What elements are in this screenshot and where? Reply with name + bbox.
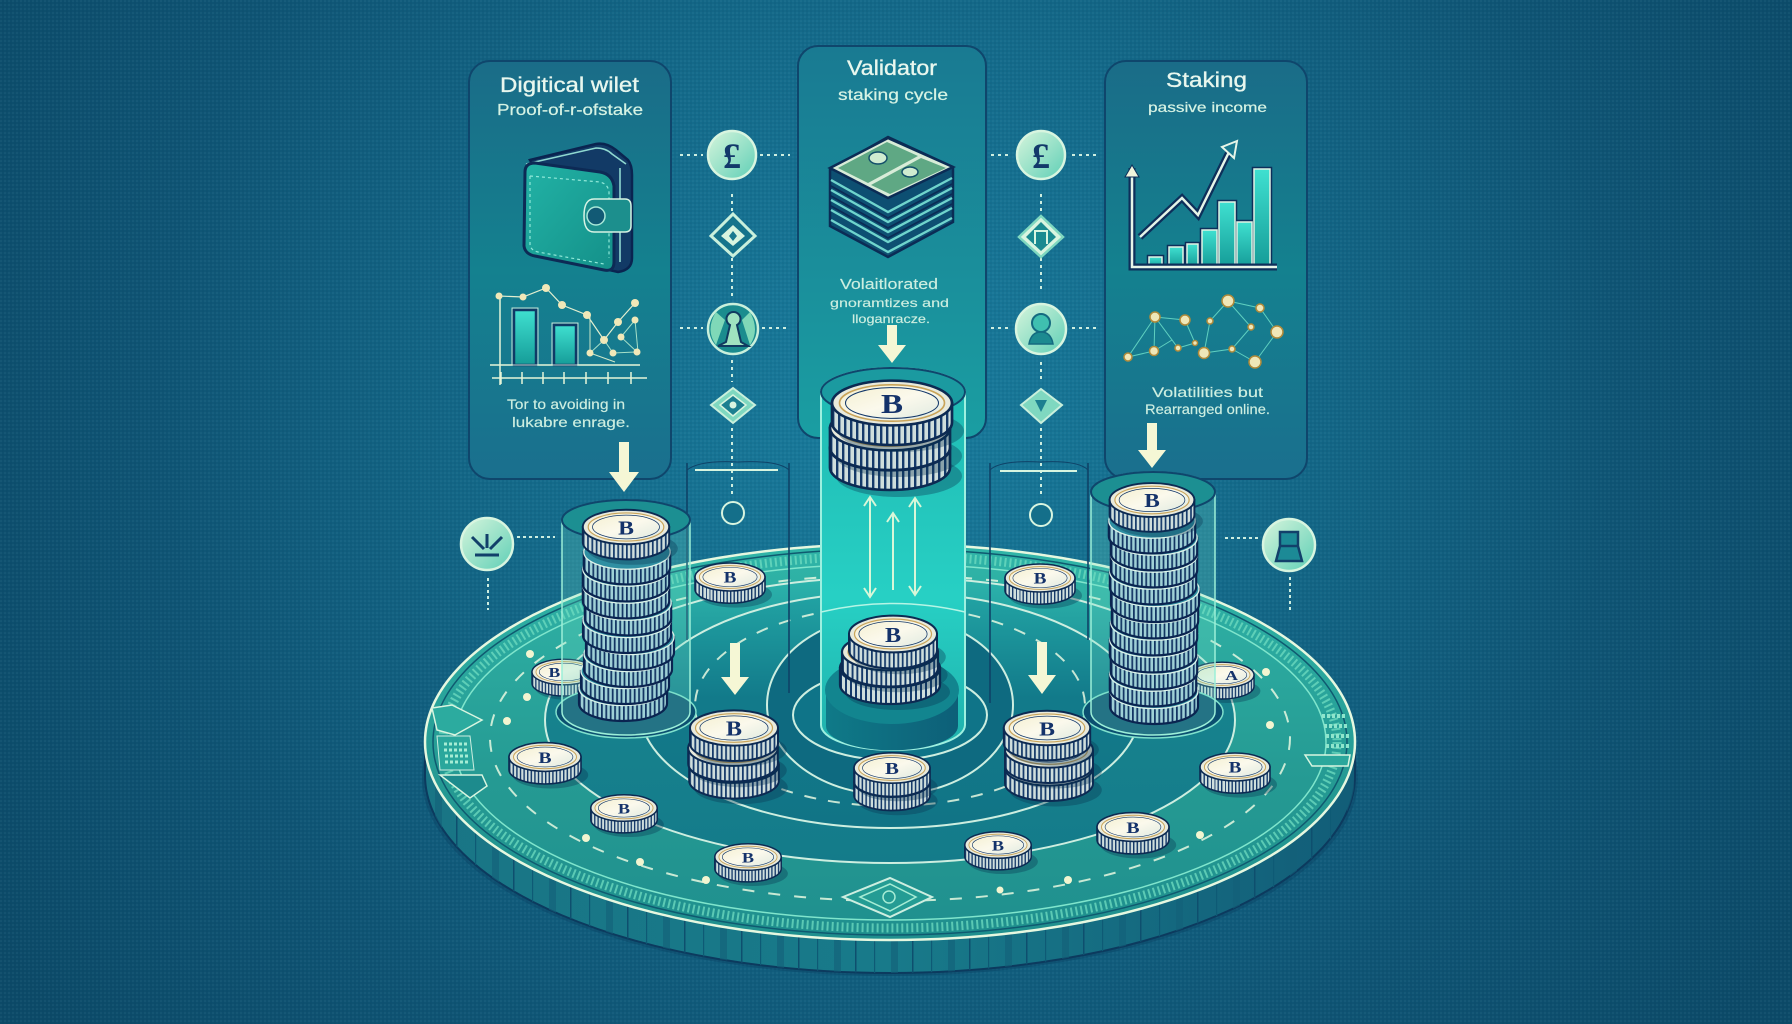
arrow: validator to stack: [878, 325, 906, 363]
dashed inner orbit: [695, 606, 1085, 806]
platform shadow: [422, 580, 1358, 976]
chart: growth bars and arrow: [1125, 141, 1277, 267]
side icon: left: [461, 518, 555, 610]
heading: validator: Validator: [847, 57, 937, 80]
coin stack: B: [1144, 490, 1160, 512]
icon: diamond eye: [711, 388, 755, 423]
platform top surface: [425, 544, 1355, 940]
coin: platform right: [1200, 753, 1277, 798]
arrow: wallet to stack: [609, 442, 639, 492]
platform: [425, 544, 1355, 973]
heading: staking: Staking: [1166, 69, 1247, 92]
body text: validator line 1: Volaitlorated: [840, 276, 938, 293]
icon: diamond: [711, 214, 755, 256]
coin: back right: [1005, 564, 1082, 609]
heading: digital wallet: Digitical wilet: [500, 74, 639, 97]
orbit ring 4: [793, 670, 987, 760]
cylinder rim: [562, 500, 690, 540]
double arrows: [864, 497, 921, 597]
coin: platform lower left: B: [618, 800, 630, 817]
icon: pound coin: [708, 131, 756, 179]
subheading: staking cycle: staking cycle: [838, 87, 948, 104]
coin stack: top: B: [881, 389, 903, 419]
body text: staking line 1: Volatilities but: [1152, 384, 1263, 400]
emblem: bottom: [843, 878, 932, 917]
tab: right: [1305, 716, 1350, 766]
coin stack: [1109, 483, 1203, 724]
platform patterned rim: [433, 549, 1347, 935]
side icon: right: [1225, 519, 1315, 612]
orbit ring 3: [767, 615, 1013, 795]
coin: platform bottom right: B: [992, 837, 1004, 854]
double arrow span: [695, 469, 778, 471]
platform side wall: [425, 742, 1355, 973]
coin stack: B: [618, 516, 634, 539]
coin: back left: B: [724, 568, 737, 586]
icon: diamond arrow: [1021, 389, 1062, 423]
ring marker: [722, 502, 744, 524]
back glass cylinder: left: [687, 462, 789, 693]
back glass cylinder: right: [990, 462, 1088, 703]
small dots on track: [503, 650, 1274, 894]
coin stack: lower left: B: [726, 717, 742, 740]
coin stack: pedestal: [840, 616, 950, 710]
icon: pawn seal: [708, 304, 758, 354]
icon: pound coin: [1017, 131, 1065, 179]
coin: right partly hidden: A: [1225, 669, 1239, 684]
coin: right partly hidden: [1190, 662, 1260, 703]
glass floor line: [821, 604, 965, 612]
pedestal: [826, 690, 958, 750]
coin: left partly hidden: B: [549, 666, 561, 681]
panel: staking: [1105, 61, 1307, 479]
coin: platform right: B: [1229, 758, 1242, 776]
icon: wallet: [524, 144, 632, 272]
chart: network nodes: [1124, 295, 1283, 368]
cylinder rim: [1091, 472, 1215, 512]
coin stack: lower right: [1004, 711, 1102, 806]
coin: platform bottom right: [965, 832, 1038, 874]
arrow: lower right: [1028, 642, 1056, 694]
cylinder with tall coin stack: left: [556, 500, 696, 738]
orbit ring 1: [545, 577, 1235, 863]
icon: pound coin: £: [1032, 136, 1050, 176]
coin: platform lower right: B: [1126, 819, 1140, 836]
body text: validator line 3: lloganracze.: [852, 312, 930, 326]
cylinder glass: [562, 500, 690, 735]
connector column: right: [991, 131, 1098, 498]
cylinder base: [1083, 686, 1223, 738]
center glass cylinder with pedestal: [821, 368, 965, 750]
connector column: left: [680, 131, 790, 498]
subheading: passive income: passive income: [1148, 99, 1267, 115]
coin: platform left: B: [538, 749, 552, 766]
double arrow span: [1000, 470, 1077, 472]
chart: bars and line: [490, 284, 647, 385]
glass body: [821, 368, 965, 750]
coin: front center: B: [885, 760, 899, 778]
orbit ring 2: [640, 592, 1140, 828]
coin: platform lower left: [591, 795, 664, 837]
coin stack: [579, 510, 678, 721]
cylinder glass: [1091, 472, 1215, 735]
icon: pound coin: £: [723, 136, 741, 176]
arrow: staking to stack: [1138, 423, 1166, 468]
glass rim: [821, 368, 965, 416]
dashed orbit: [490, 575, 1290, 901]
body text: wallet line 2: lukabre enrage.: [512, 414, 630, 430]
body text: validator line 2: gnoramtizes and: [830, 296, 949, 310]
tab: left: [432, 705, 487, 798]
coin: platform bottom left: B: [742, 849, 754, 866]
coin stack: top: [830, 381, 964, 497]
coin: back right: B: [1034, 569, 1047, 587]
icon: diamond n: [1019, 216, 1063, 257]
coin: platform bottom left: [715, 844, 788, 886]
icon: person badge: [1016, 304, 1066, 354]
coin stack: lower left: [688, 710, 788, 804]
arrow: lower left: [721, 643, 749, 695]
subheading: proof of stake: Proof-of-r-ofstake: [497, 102, 643, 119]
icon: stack of banknotes: [830, 137, 953, 257]
body text: wallet: Tor to avoiding in: [507, 396, 625, 412]
coin: front center: [854, 753, 938, 815]
ring marker: [1030, 504, 1052, 526]
coin: platform lower right: [1097, 813, 1176, 858]
coin stack: pedestal: B: [885, 623, 901, 647]
coin: platform left: [509, 743, 588, 788]
coin: back left: [695, 563, 772, 608]
body text: staking line 2: Rearranged online.: [1145, 401, 1270, 417]
panel: digital wallet: [469, 61, 671, 479]
cylinder base: [556, 686, 696, 738]
panel: validator: [798, 46, 986, 438]
coin: left partly hidden: [532, 659, 602, 700]
cylinder with tall coin stack: right: [1083, 472, 1223, 738]
coin stack: lower right: B: [1039, 717, 1055, 740]
